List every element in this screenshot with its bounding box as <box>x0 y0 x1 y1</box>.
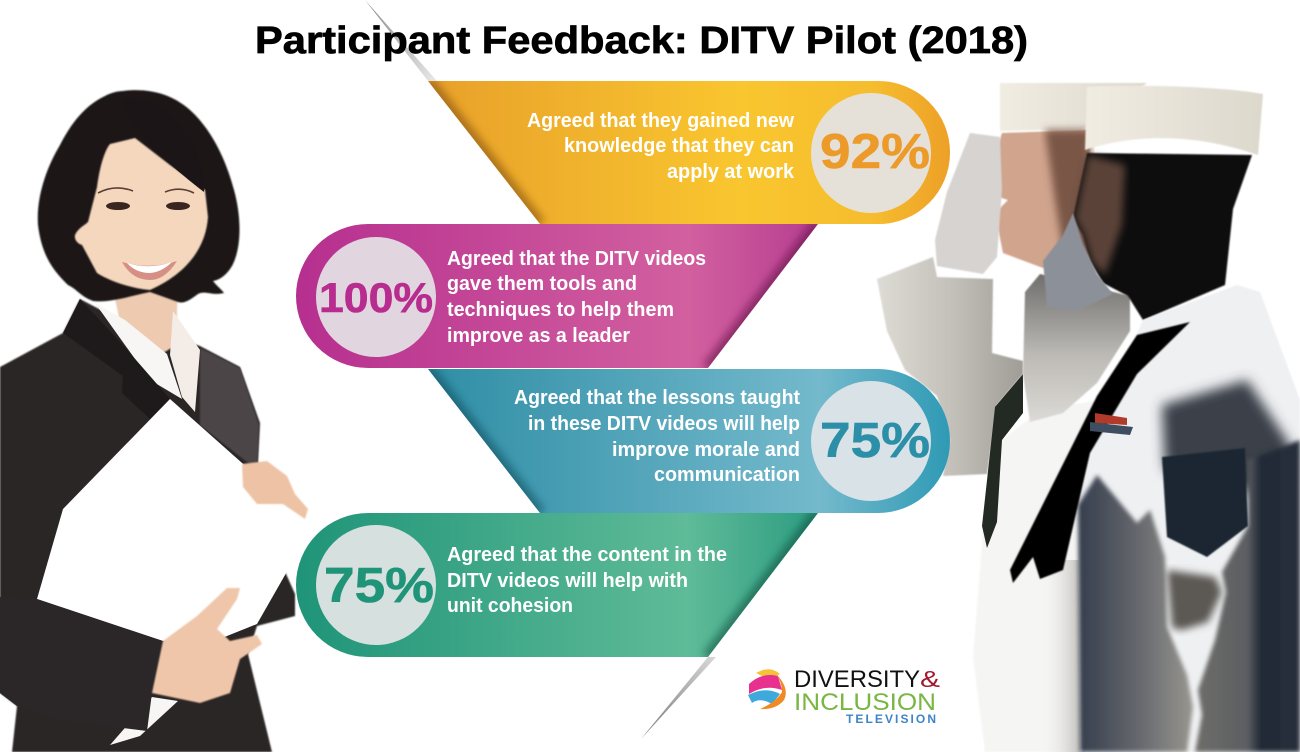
jacket <box>0 299 295 752</box>
panel: 75% morale and communication <box>428 369 950 513</box>
description <box>447 544 727 617</box>
edge shadow <box>428 369 540 513</box>
description: Agreed that they gained new <box>527 110 794 132</box>
brows <box>98 188 133 193</box>
right hand <box>242 461 308 519</box>
front sailor glove <box>1043 213 1113 311</box>
edge shadow <box>708 513 818 657</box>
jacket light side <box>200 348 259 470</box>
edge shadow <box>708 224 818 368</box>
left sleeve <box>0 597 163 731</box>
fringe <box>123 98 204 192</box>
description <box>527 110 795 183</box>
stat value: 75% <box>324 559 434 613</box>
left hand <box>152 588 262 703</box>
neck <box>112 280 178 355</box>
front sailor tie <box>1010 322 1190 583</box>
panel: 75% unit cohesion <box>296 513 818 657</box>
folder <box>37 399 313 641</box>
stat circle <box>811 381 931 501</box>
description <box>447 248 706 347</box>
edge shadow <box>428 81 540 224</box>
smile <box>122 261 177 280</box>
logo: Diversity & Inclusion Television: TELEVISION <box>846 712 936 726</box>
stat value: 100% <box>319 274 433 321</box>
description: Agreed that the lessons taught <box>514 387 800 409</box>
figure: businesswoman holding a folder <box>0 90 313 752</box>
description: improve as a leader <box>447 325 630 347</box>
logo: Diversity & Inclusion Television: & <box>920 666 940 692</box>
front sailor torso shadow <box>1078 475 1193 752</box>
panel: 100% tools and techniques <box>296 224 818 368</box>
description <box>514 387 800 486</box>
rear sailor face <box>983 130 1090 268</box>
logo text: DIVERSITY <box>794 666 920 693</box>
hair <box>38 90 240 303</box>
stat value: 75% <box>820 414 930 468</box>
description: gave them tools and <box>447 273 637 295</box>
front sailor sleeve shadow <box>1162 380 1290 500</box>
lapel <box>63 299 170 419</box>
eyes <box>106 202 130 210</box>
description: communication <box>654 464 800 486</box>
front sailor hat <box>1085 86 1263 155</box>
shirt cuff <box>110 697 178 745</box>
rear sailor lower shading <box>1040 560 1085 752</box>
figure: saluting sailors <box>877 83 1300 752</box>
stat value: 92% <box>820 125 930 179</box>
logo: Diversity & Inclusion Television <box>747 666 940 726</box>
description: techniques to help them <box>447 299 674 321</box>
description: knowledge that they can <box>564 135 794 157</box>
icon: globe <box>747 669 787 710</box>
logo: Diversity & Inclusion Television: INCLUSION <box>794 689 936 716</box>
title: Participant Feedback: DITV Pilot (2018) <box>255 20 1028 62</box>
front sailor right shadow <box>1195 440 1300 752</box>
ribbons <box>1090 413 1133 435</box>
panel: 92% knowledge <box>428 81 950 224</box>
description: Agreed that the DITV videos <box>447 248 706 270</box>
rear sailor body <box>973 400 1100 752</box>
front sailor raised arm <box>1023 274 1130 422</box>
decorative spike: bottom <box>641 657 716 739</box>
description: apply at work <box>667 161 795 183</box>
stat circle <box>316 237 436 357</box>
rear sailor hat <box>1000 83 1147 131</box>
description: in these DITV videos will help <box>528 413 800 435</box>
stat circle <box>316 525 436 645</box>
description: unit cohesion <box>447 595 573 617</box>
rear sailor glove <box>935 133 1002 274</box>
front sailor uniform <box>1078 285 1300 752</box>
description: improve morale and <box>612 439 800 461</box>
shirt collar <box>95 303 182 399</box>
rear sailor tie <box>982 374 1023 548</box>
description: Agreed that the content in the <box>447 544 727 566</box>
front sailor elbow fold <box>1167 570 1222 630</box>
stat circle <box>811 93 931 213</box>
front sailor head <box>1073 153 1252 320</box>
rear sailor sleeve <box>877 257 1023 476</box>
front sailor lit face <box>1075 155 1125 275</box>
sleeve patch <box>1162 448 1248 557</box>
face <box>75 138 208 290</box>
decorative spike: top <box>365 0 437 81</box>
description: DITV videos will help with <box>447 570 688 592</box>
